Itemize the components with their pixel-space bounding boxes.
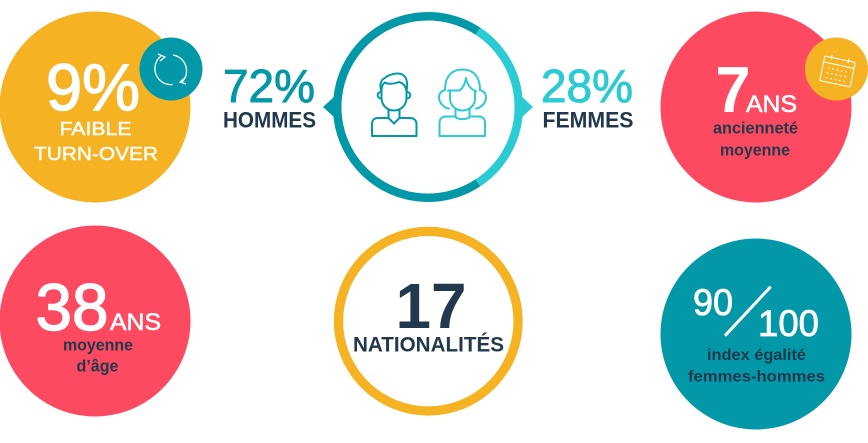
ancienneté label: ancienneté: [713, 120, 798, 138]
index score: 90: [693, 281, 733, 323]
icon: man: [372, 74, 416, 136]
âge label second line: d’âge: [76, 358, 118, 376]
panel: index égalité: [660, 238, 852, 430]
ancienneté unit: ANS: [746, 91, 797, 118]
index maximum: 100: [758, 302, 819, 344]
panel: gender ring: [323, 16, 533, 198]
panel: femmes share: [541, 60, 634, 132]
turn-over label: FAIBLE: [60, 118, 132, 139]
nationalités value: 17: [396, 270, 466, 342]
index label: index égalité: [707, 347, 806, 364]
turn-over label second line: TURN-OVER: [34, 143, 158, 164]
femmes percentage: 28%: [541, 60, 633, 112]
ancienneté value: 7: [716, 53, 750, 126]
index slash: [725, 287, 771, 336]
panel: âge: [0, 226, 190, 416]
arrow: right pointer: [521, 96, 533, 118]
icon: refresh badge: [140, 38, 202, 100]
panel: hommes share: [223, 60, 316, 132]
âge value: 38: [36, 270, 108, 344]
ring: femmes arc: [478, 31, 519, 183]
icon: calendar badge: [805, 38, 868, 100]
turn-over percentage: 9%: [46, 50, 140, 124]
index label second line: femmes-hommes: [688, 369, 825, 386]
ring: hommes arc: [337, 16, 478, 198]
ancienneté label second line: moyenne: [720, 142, 790, 160]
hommes label: HOMMES: [223, 108, 316, 132]
arrow: left pointer: [323, 96, 335, 118]
panel: nationalités: [338, 231, 518, 411]
hommes percentage: 72%: [223, 60, 315, 112]
icon: woman: [439, 70, 486, 136]
panel: ancienneté: [660, 12, 868, 202]
âge label: moyenne: [63, 337, 133, 355]
nationalités label: NATIONALITÉS: [353, 334, 504, 357]
panel: turn-over: [0, 12, 202, 202]
âge unit: ANS: [110, 309, 161, 336]
femmes label: FEMMES: [542, 108, 634, 132]
